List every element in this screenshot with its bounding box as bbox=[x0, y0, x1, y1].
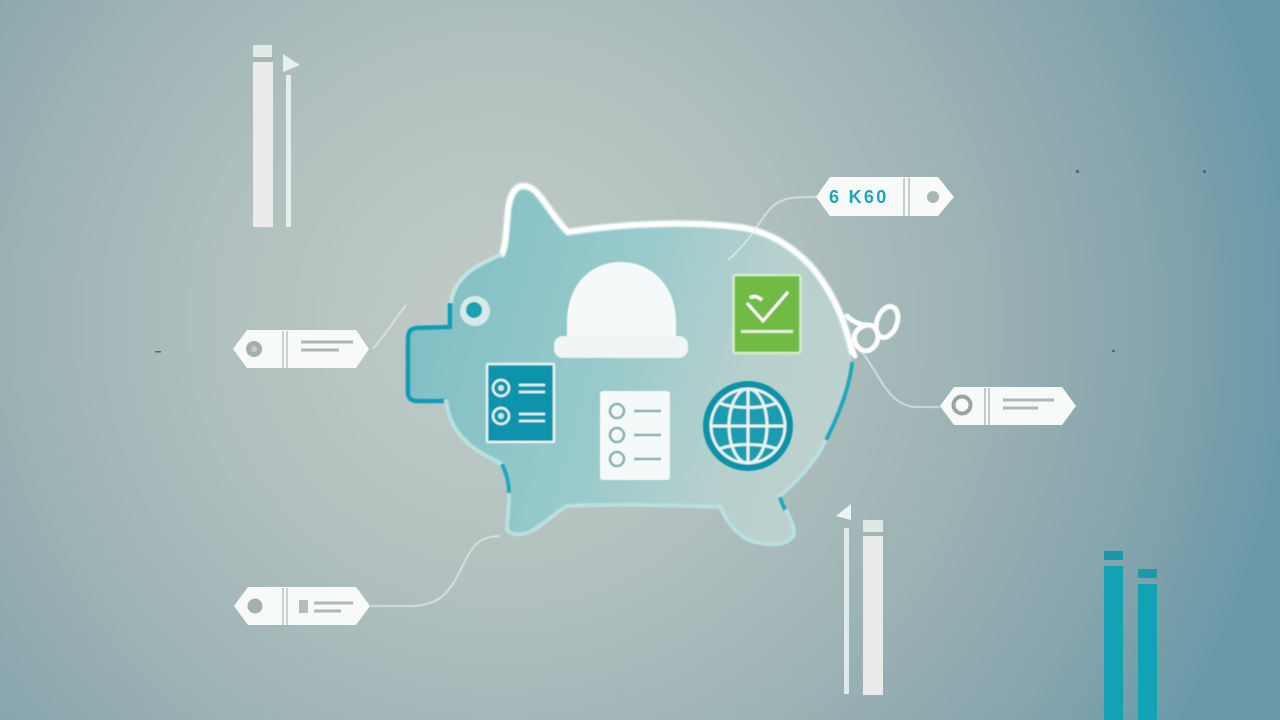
bar group: teal bbox=[1104, 551, 1157, 720]
tag icon bbox=[927, 191, 939, 203]
icon: green checklist card bbox=[734, 275, 800, 353]
pig outline: white top halo bbox=[502, 186, 852, 352]
dark specks bbox=[155, 170, 1206, 352]
icon: globe bbox=[703, 381, 793, 471]
bar group: top left bbox=[253, 45, 300, 227]
pig outline: white top bbox=[502, 186, 852, 352]
icon: pig eye bbox=[460, 296, 490, 326]
tag: left bbox=[233, 330, 369, 368]
tag label: 6 K60 bbox=[829, 187, 889, 207]
pig outline: teal accents bbox=[502, 362, 852, 510]
pig fill bbox=[408, 186, 852, 544]
icon: pig tail bbox=[847, 304, 902, 356]
panel: pig body bbox=[408, 186, 902, 544]
pig outline: pale lower edge bbox=[446, 401, 826, 544]
pig outline: pale left head bbox=[451, 254, 502, 303]
icon: teal list card bbox=[487, 364, 554, 442]
icon: hard hat bbox=[554, 262, 688, 358]
connector lines bbox=[370, 197, 940, 606]
pig outline: teal snout bbox=[408, 303, 450, 401]
icon: white checklist card bbox=[600, 391, 670, 480]
tag: bottom left bbox=[234, 587, 370, 625]
tag: right bbox=[940, 387, 1076, 425]
bar group: bottom centre bbox=[836, 504, 883, 695]
tag: top right bbox=[816, 177, 954, 216]
